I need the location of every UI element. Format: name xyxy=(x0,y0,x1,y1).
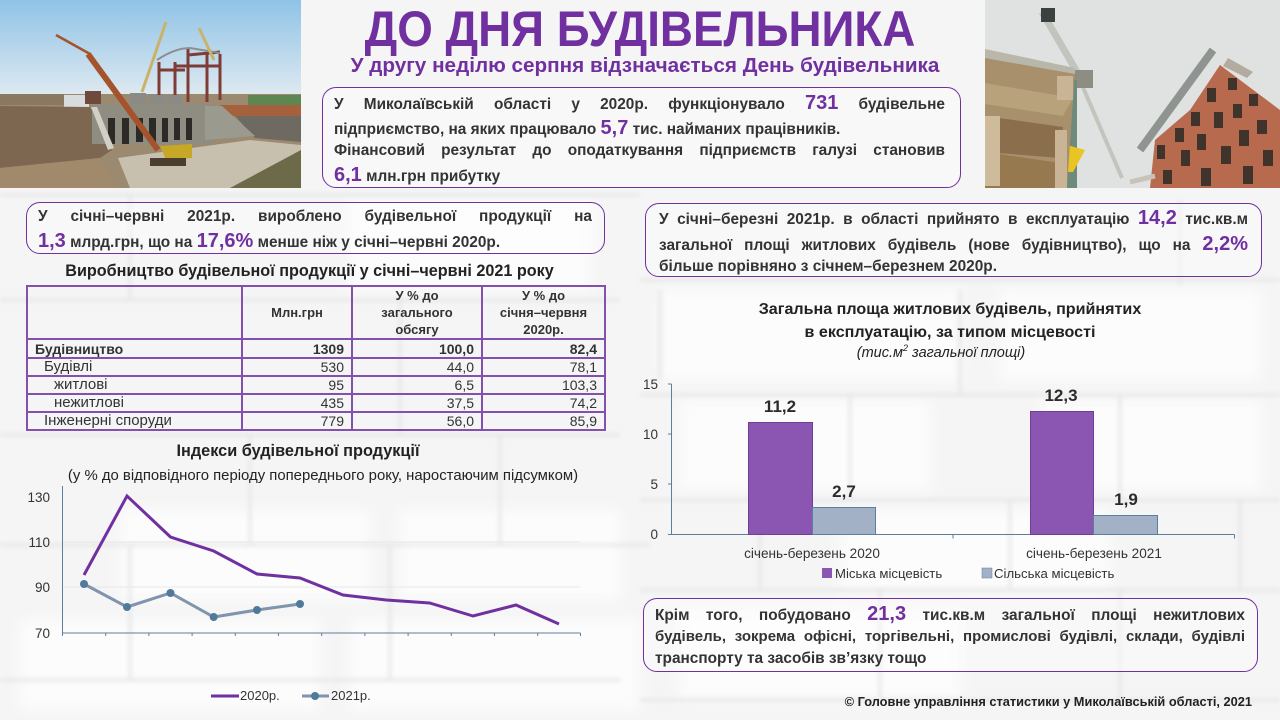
callout: production volume: 1,3 млрд.грн, що на 17,6% менше ніж у січні–червні 2020р. xyxy=(38,230,500,252)
group: січень-березень 2021: 1,9 xyxy=(1114,490,1138,509)
legend: Сільська місцевість xyxy=(994,566,1114,581)
table: construction output: 82,4 xyxy=(570,340,597,356)
table: construction output: 103,3 xyxy=(562,377,597,393)
x-axis labels: січень-березень 2020 xyxy=(744,546,880,561)
group: січень-березень 2020: 11,2 xyxy=(764,397,796,416)
series: 2020 xyxy=(84,496,559,624)
table: construction output: 6,5 xyxy=(455,377,474,393)
y-axis labels xyxy=(27,490,50,641)
table: construction output: Млн.грн xyxy=(271,305,323,320)
y-axis labels: 90 xyxy=(35,580,50,595)
group: січень-березень 2020 xyxy=(748,397,876,534)
callout: regional enterprises: 6,1 млн.грн прибутку xyxy=(334,164,500,186)
table: construction output: 95 xyxy=(328,377,344,393)
right building xyxy=(1150,65,1280,188)
legend xyxy=(822,566,1114,581)
x-axis labels xyxy=(744,546,1162,561)
subtitle: У другу неділю серпня відзначається День будівельника xyxy=(351,54,939,77)
left building xyxy=(985,50,1075,188)
y-axis labels xyxy=(643,377,658,542)
table: construction output: нежитлові xyxy=(54,394,124,411)
source note: © Головне управління статистики у Миколаївській області, 2021 xyxy=(845,694,1252,709)
legend: 2020р. xyxy=(240,688,280,703)
dam piers xyxy=(92,104,212,144)
y-axis labels: 70 xyxy=(35,626,50,641)
callout: non-residential buildings: транспорту та засобів зв’язку тощо xyxy=(655,650,926,667)
table: construction output: 1309 xyxy=(313,340,344,356)
callout: production volume xyxy=(26,202,605,254)
legend xyxy=(211,688,371,703)
table: construction output: 2020р. xyxy=(523,322,564,337)
table: construction output: 100,0 xyxy=(439,340,474,356)
bar chart unit note: (тис.м2 загальної площі) xyxy=(857,343,1025,361)
rubble slope xyxy=(0,106,112,168)
table: construction output: січня–червня xyxy=(500,305,587,320)
table: construction output: 37,5 xyxy=(447,395,474,411)
callout: non-residential buildings: Крім того, побудовано 21,3 тис.кв.м загальної площі нежитлових xyxy=(655,603,1245,625)
table: construction output: 530 xyxy=(321,359,344,375)
callout: commissioned housing: У січні–березні 2021р. в області прийнято в експлуатацію 14,2 тис.кв.м xyxy=(659,207,1248,229)
table: construction output: Інженерні споруди xyxy=(44,412,172,429)
line chart heading: Індекси будівельної продукції xyxy=(176,442,420,460)
series: 2021 xyxy=(80,580,304,621)
bar chart: housing area by locality xyxy=(643,377,1235,581)
crane jib xyxy=(1042,12,1122,178)
table: construction output: 435 xyxy=(321,395,344,411)
table: construction output: 74,2 xyxy=(570,395,597,411)
table: construction output: 44,0 xyxy=(447,359,474,375)
bar chart heading xyxy=(759,300,1142,341)
group: січень-березень 2021 xyxy=(1030,386,1158,534)
hoist arm xyxy=(1140,50,1213,150)
title: ДО ДНЯ БУДІВЕЛЬНИКА xyxy=(365,1,915,57)
callout: non-residential buildings xyxy=(643,598,1258,672)
y-axis labels: 0 xyxy=(650,527,658,542)
x-axis labels: січень-березень 2021 xyxy=(1026,546,1162,561)
table: construction output: У % до xyxy=(522,288,565,303)
y-axis labels: 5 xyxy=(650,477,658,492)
y-axis labels: 110 xyxy=(28,535,50,550)
group: січень-березень 2021: 12,3 xyxy=(1044,386,1078,405)
crane xyxy=(56,35,158,150)
bar chart heading: Загальна площа житлових будівель, прийнятих xyxy=(759,300,1141,318)
photo: dam construction with crawler crane xyxy=(0,0,301,188)
legend: Міська місцевість xyxy=(835,566,942,581)
callout: regional enterprises: підприємство, на яких працювало 5,7 тис. найманих працівників. xyxy=(334,117,840,139)
bar chart heading: в експлуатацію, за типом місцевості xyxy=(805,323,1095,341)
table: construction output: обсягу xyxy=(395,322,439,337)
table: construction output: 56,0 xyxy=(447,413,474,429)
y-axis labels: 10 xyxy=(643,427,658,442)
table heading: Виробництво будівельної продукції у січні–червні 2021 року xyxy=(65,262,554,280)
table: construction output: У % до xyxy=(395,288,439,303)
table: construction output: Будівництво xyxy=(35,340,123,356)
callout: non-residential buildings: будівель, зокрема офісні, торгівельні, промислові будівлі, склади, будівлі xyxy=(655,628,1245,645)
table: construction output: 85,9 xyxy=(570,413,597,429)
callout: production volume: У січні–червні 2021р. вироблено будівельної продукції на xyxy=(38,208,592,225)
legend: 2021р. xyxy=(331,688,371,703)
callout: commissioned housing: загальної площі житлових будівель (нове будівництво), що на 2,2% xyxy=(659,233,1248,255)
line chart subtitle: (у % до відповідного періоду попереднього року, наростаючим підсумком) xyxy=(68,468,578,484)
table: construction output: житлові xyxy=(54,376,108,393)
callout: regional enterprises: У Миколаївській області у 2020р. функціонувало 731 будівельне xyxy=(334,92,945,114)
group: січень-березень 2020: 2,7 xyxy=(832,482,856,501)
table: construction output: Будівлі xyxy=(44,358,92,375)
table: construction output: загального xyxy=(381,305,453,320)
callout: regional enterprises xyxy=(322,87,961,188)
steel frame xyxy=(159,48,220,102)
line chart: building output indices xyxy=(27,486,581,703)
callout: commissioned housing: більше порівняно з січнем–березнем 2020р. xyxy=(659,258,997,275)
table: construction output: 779 xyxy=(321,413,344,429)
callout: regional enterprises: Фінансовий результат до оподаткування підприємств галузі становив xyxy=(334,142,945,159)
table: construction output: 78,1 xyxy=(570,359,597,375)
table: construction output xyxy=(26,285,606,431)
y-axis labels: 15 xyxy=(643,377,658,392)
callout: commissioned housing xyxy=(645,203,1262,277)
photo: buildings under construction with tower crane xyxy=(985,0,1280,188)
y-axis labels: 130 xyxy=(27,490,50,505)
